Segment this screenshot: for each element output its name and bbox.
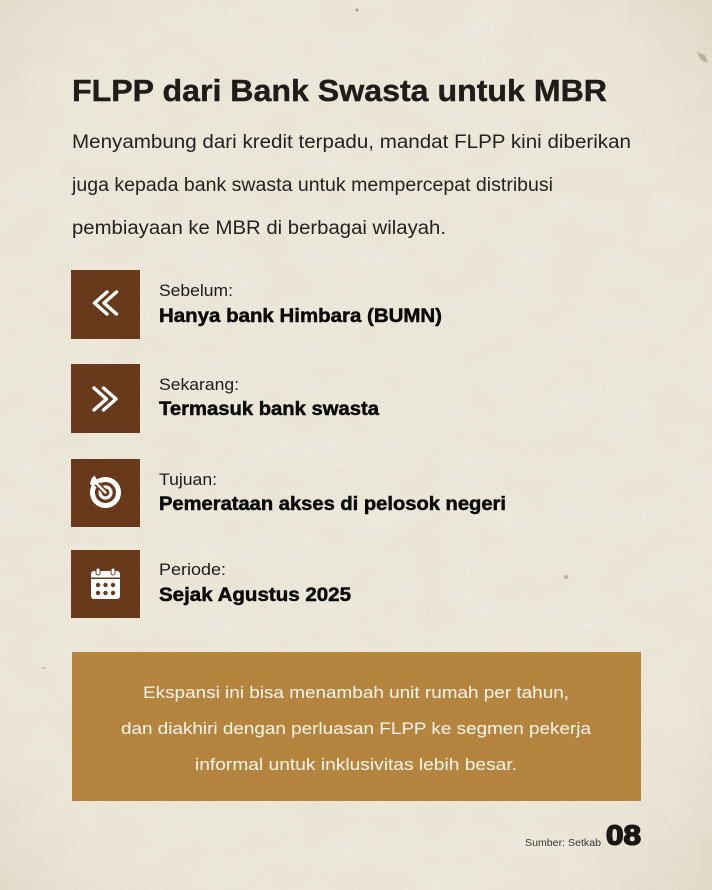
value: periode: Sejak Agustus 2025 <box>159 584 351 606</box>
intro paragraph: Menyambung dari kredit terpadu, mandat FLPP kini diberikan <box>72 132 631 153</box>
label: tujuan: Tujuan: <box>159 470 217 489</box>
value: sebelum: Hanya bank Himbara (BUMN) <box>159 305 442 327</box>
callout: informal untuk inklusivitas lebih besar. <box>195 755 517 774</box>
item: sekarang <box>71 364 379 433</box>
source note: Sumber: Setkab <box>525 837 601 849</box>
icon: double chevron right <box>71 364 140 433</box>
intro paragraph: pembiayaan ke MBR di berbagai wilayah. <box>72 218 446 239</box>
callout: dan diakhiri dengan perluasan FLPP ke segmen pekerja <box>121 719 592 738</box>
value: tujuan: Pemerataan akses di pelosok negeri <box>159 493 506 515</box>
intro paragraph <box>71 132 631 239</box>
label: periode: Periode: <box>159 560 226 579</box>
value: sekarang: Termasuk bank swasta <box>159 398 379 420</box>
item: periode <box>71 550 351 618</box>
item: sebelum <box>71 270 442 339</box>
icon: target <box>71 459 140 527</box>
icon: calendar <box>71 550 140 618</box>
icon: double chevron left <box>71 270 140 339</box>
title: FLPP dari Bank Swasta untuk MBR <box>72 73 607 108</box>
item: tujuan <box>71 459 506 527</box>
label: sekarang: Sekarang: <box>159 375 239 394</box>
callout <box>72 652 641 801</box>
label: sebelum: Sebelum: <box>159 281 233 300</box>
intro paragraph: juga kepada bank swasta untuk mempercepat distribusi <box>71 175 553 196</box>
page number: 08 <box>606 820 641 850</box>
callout: Ekspansi ini bisa menambah unit rumah per tahun, <box>143 683 569 702</box>
